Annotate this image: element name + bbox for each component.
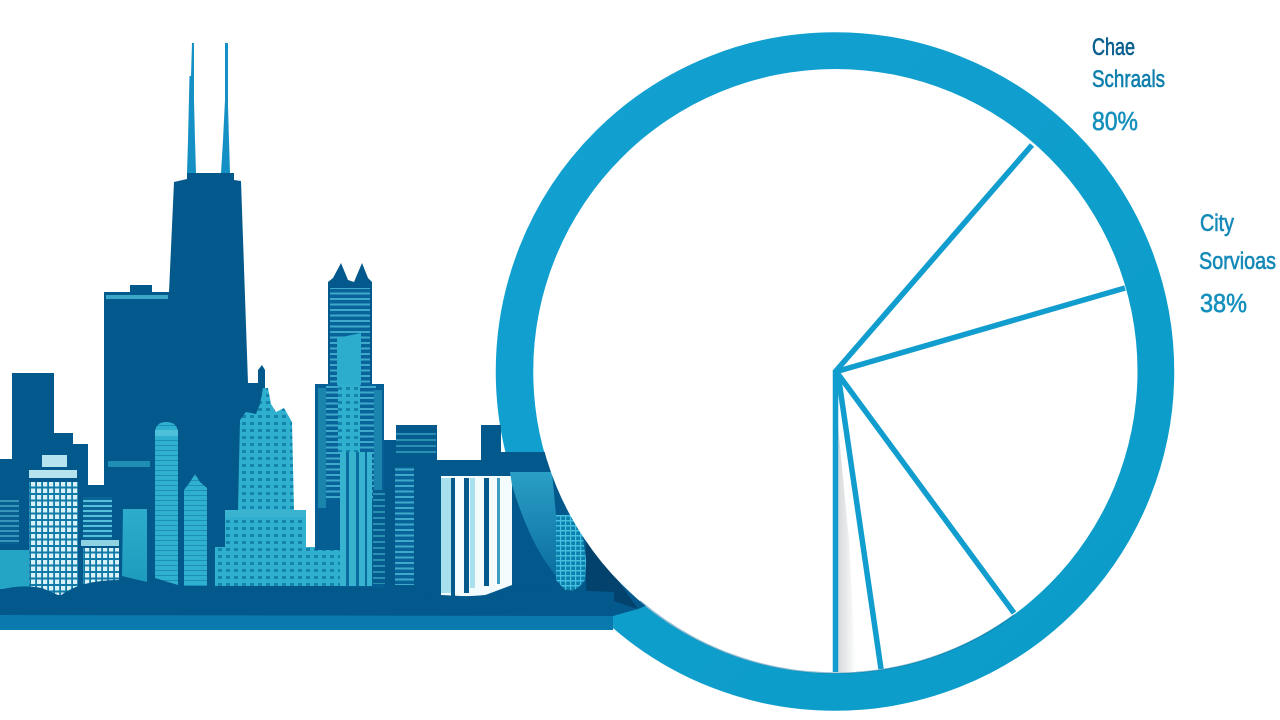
sears tower antennas (187, 43, 230, 173)
label name line 1: City (1200, 210, 1234, 237)
grey shaded slice (838, 425, 856, 672)
white grid building (29, 455, 78, 595)
dark shadow near disc (586, 535, 638, 609)
label: schools (1092, 34, 1165, 136)
small ledge (108, 461, 150, 467)
white pie disc (534, 69, 1138, 673)
far left windows (0, 500, 19, 544)
striped building (81, 497, 119, 584)
white striped building (441, 476, 512, 597)
disc bottom shadow (640, 601, 1014, 673)
slice dividers (835, 145, 1125, 672)
label percent: 38% (1200, 288, 1247, 318)
label name line 2: Schraals (1092, 66, 1165, 93)
slim tower (155, 422, 178, 585)
twin spire tower (315, 263, 385, 590)
pie ring (514, 51, 1156, 692)
left tower roof windows (106, 295, 168, 299)
label: city services (1199, 210, 1276, 318)
deco tower (215, 388, 320, 586)
label name line 1: Chae (1092, 34, 1135, 61)
shoreline band (0, 615, 613, 630)
curved glass building (510, 472, 556, 576)
glass building (122, 509, 147, 582)
lattice building (556, 515, 586, 591)
ground silhouette (0, 580, 614, 615)
label percent: 80% (1092, 106, 1138, 136)
middle window tower (395, 432, 436, 585)
cyan low block (0, 550, 42, 589)
dark background towers (0, 173, 660, 616)
pie chart face (534, 69, 1138, 673)
chicago skyline (0, 43, 660, 630)
short tower (184, 474, 207, 586)
